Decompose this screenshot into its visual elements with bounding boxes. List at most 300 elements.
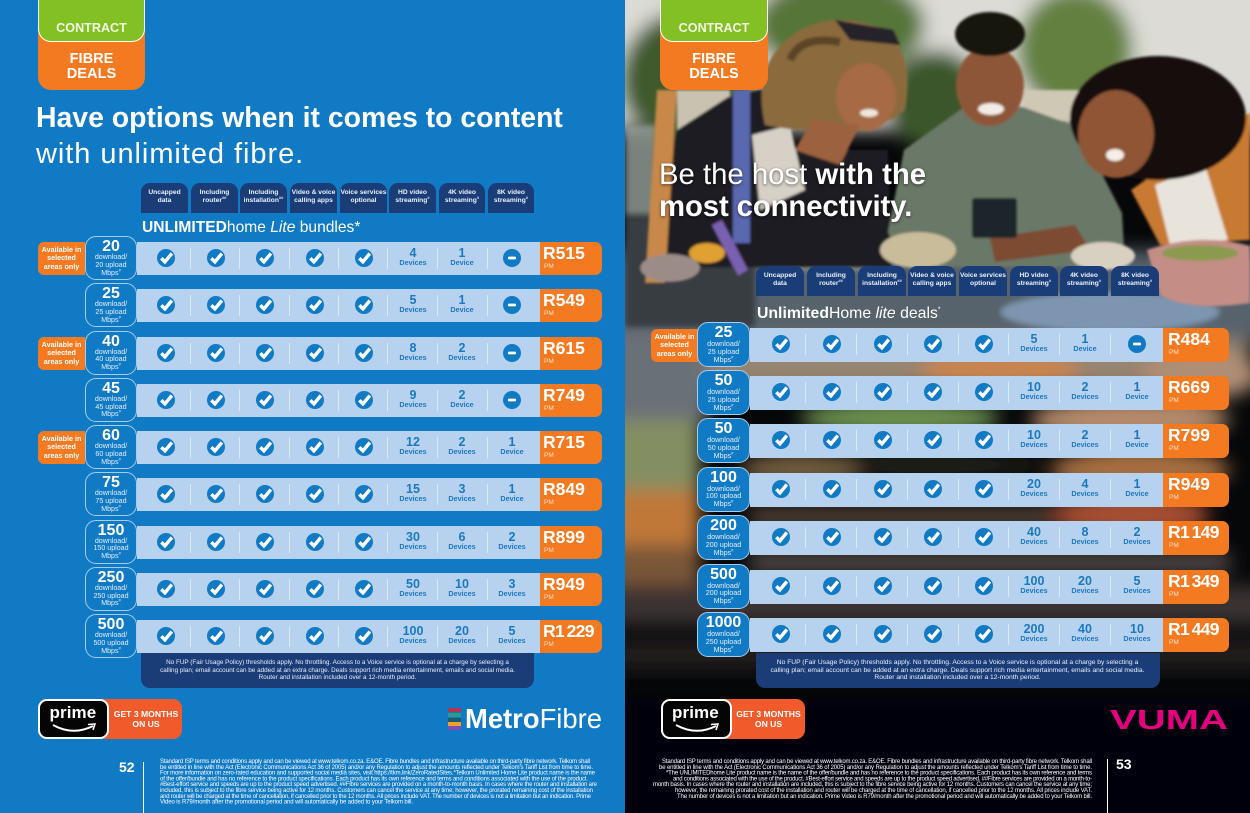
deal row: 100 Mbps R949: 20 [1027,476,1041,490]
table header: left feature tabs: optional [350,197,376,204]
deal row: 50/50 Mbps R799: 1 [1134,428,1140,442]
deal row: 100 Mbps R949: download/ [707,484,740,492]
deal row: 50/50 Mbps R799: Devices [1020,440,1048,449]
deal row: 45 Mbps R749: 45 upload [95,403,127,411]
table header: left feature tabs: streaming# [494,195,528,204]
deal row: 60 Mbps R715: 1 [509,435,515,449]
deal row: 1000 Mbps R1 449: Devices [1071,634,1099,643]
deal row: 100 Mbps R949: Device [1125,488,1149,498]
terms and conditions, left: and router will be charged at the time of cancellation, if cancelled prior to the 12 months. All prices include VAT. The number of devices is not a limitation but an indication. Prime [160,794,592,800]
table header: left feature tabs: router## [203,195,226,204]
deal row: 60 Mbps R715: 12 [406,435,420,449]
deal row: 150 Mbps R899: Mbps# [101,551,121,560]
deal row: 250 Mbps R949: download/ [95,584,127,592]
table header: left feature tabs: Including [200,189,229,196]
deal row: 50/25 Mbps R669: PM [1169,397,1179,404]
badge: contract fibre deals, left: CONTRACT [56,21,127,35]
deal row: 50/25 Mbps R669: 1 [1134,380,1140,394]
deal row: 200 Mbps R1 149: Devices [1123,537,1151,546]
deal row: 250 Mbps R949: 50 [406,577,420,591]
deal row: 75 Mbps R849: Mbps# [101,503,121,513]
deal row: 250 Mbps R949: R949 [543,574,585,594]
table header: right feature tabs: 4K video [1070,272,1098,279]
deal row: 500 Mbps R1 229: Devices [399,636,427,645]
deal row: 150 Mbps R899: 150 [98,522,124,538]
callout: prime video offer, right: prime [672,703,719,722]
table header: left feature tabs: 8K video [497,189,525,196]
deal row: 500 Mbps R1 349: R1 349 [1168,570,1219,590]
deal row: 500 Mbps R1 349: Mbps# [714,596,733,605]
deal row: 150 Mbps R899: download/ [95,536,127,544]
tag: available in selected areas, 25: Available in [655,332,694,340]
terms and conditions, right: month basis. In cases where the router and installation are included, this is subject to the fibre service being active for 12 months. Customers can cancel the service at any time; [653,782,1092,788]
deal row: 25 Mbps R484: Mbps# [714,354,733,364]
deal row: 25 Mbps R549 [85,283,602,327]
deal row: 500 Mbps R1 229: 500 [98,616,124,633]
deal row: 20 Mbps R515: download/ [95,253,127,261]
badge: contract fibre deals, right [660,0,768,90]
deal row: 200 Mbps R1 149: PM [1169,542,1179,549]
deal row: 250 Mbps R949: 10 [455,577,469,591]
deal row: 75 Mbps R849: 75 [102,474,120,491]
logo: MetroFibre: MetroFibre [465,703,602,734]
deal row: 100 Mbps R949 [697,467,1229,512]
deal row: 45 Mbps R749: Mbps# [101,409,121,418]
table header: left feature tabs [141,183,534,213]
deal row: 50/25 Mbps R669: Mbps# [714,402,733,412]
terms and conditions, left: of the offer/bundle and has no reference to the product specifications. Each product has its own reference and terms and conditions associated with the use of the product. [160,776,588,782]
title: right page heading [659,158,926,224]
deal row: 150 Mbps R899: R899 [543,526,585,546]
deal row: 40 Mbps R615 [85,331,602,375]
callout: prime video offer, left: GET 3 MONTHS [114,709,178,719]
deal row: 25 Mbps R484: Device [1073,344,1097,353]
deal row: 500 Mbps R1 349: download/ [707,580,740,590]
table header: right feature tabs: Including [816,272,846,279]
deal row: 200 Mbps R1 149: 2 [1134,525,1140,539]
deal row: 25 Mbps R549: 25 upload [95,308,127,316]
note: right fair usage policy [756,653,1160,688]
deal row: 75 Mbps R849: download/ [95,489,127,497]
deal row: 25 Mbps R549: 5 [410,293,416,307]
deal row: 1000 Mbps R1 449: download/ [707,629,740,638]
deal row: 25 Mbps R549: Devices [399,305,427,314]
deal row: 200 Mbps R1 149: download/ [707,532,740,541]
deal row: 150 Mbps R899: PM [544,546,554,554]
deal row: 1000 Mbps R1 449: Devices [1020,634,1048,643]
table header: left feature tabs: Voice services [340,189,386,196]
deal row: 50/50 Mbps R799: Mbps# [714,450,733,460]
deal row: 200 Mbps R1 149: 200 upload [706,540,741,549]
deal row: 60 Mbps R715: Mbps# [101,456,121,466]
deal row: 100 Mbps R949: 1 [1134,476,1140,490]
callout: prime video offer, left [38,699,182,739]
table header: right feature tabs: Voice services [960,272,1006,279]
tag: available in selected areas, 40: selected [47,348,76,357]
terms and conditions, right [653,758,1108,813]
deal row: 75 Mbps R849: 3 [459,482,465,496]
deal row: 25 Mbps R549: PM [544,310,554,317]
deal row: 500 Mbps R1 349 [697,564,1229,609]
deal row: 40 Mbps R615: R615 [543,338,585,358]
table header: left feature tabs: installation## [244,195,283,204]
table header: right feature tabs: calling apps [913,280,951,287]
deal row: 25 Mbps R484: 25 [715,324,732,341]
deal row: 100 Mbps R949: Mbps# [714,499,733,508]
title: right page heading: Be the host with the [659,158,926,191]
badge: contract fibre deals, right: CONTRACT [679,21,749,35]
deal row: 25 Mbps R484 [697,322,1229,367]
panel: left page background [0,0,625,813]
deal row: 75 Mbps R849: Device [500,494,524,503]
deal row: 500 Mbps R1 229: 500 upload [93,639,129,647]
deal row: 250 Mbps R949: PM [544,594,554,601]
deal row: 250 Mbps R949: Devices [498,589,526,598]
deal row: 1000 Mbps R1 449: PM [1169,639,1179,646]
deal row: 40 Mbps R615: Mbps# [101,362,121,371]
deal row: 25 Mbps R549: download/ [95,300,127,308]
table header: right feature tabs: HD video [1020,272,1048,279]
deal row: 1000 Mbps R1 449: R1 449 [1168,619,1219,639]
deal row: 25 Mbps R484: download/ [707,339,740,348]
deal row: 250 Mbps R949: Devices [399,589,427,598]
table header: right feature tabs: Video & voice [910,272,954,279]
deal row: 1000 Mbps R1 449: 1000 [706,614,741,631]
terms and conditions, left: For more information on zero-rated education and supported social media sites, visit https://tkm.link/ZeroRatedSites.*Telkom Unlimited Home Lite product name is the name [160,771,596,777]
deal row: 20 Mbps R515: Device [450,258,474,267]
title: left page heading: with unlimited fibre. [36,138,304,170]
deal row: 500 Mbps R1 349: 500 [710,566,737,582]
deal row: 50/25 Mbps R669: Devices [1071,392,1099,401]
deal row: 45 Mbps R749 [85,378,602,422]
terms and conditions, right: Standard ISP terms and conditions apply and can be viewed at www.telkom.co.za. E&OE. Fibre bundles and infrastructure available on third-party fibre network. Telkom shall [662,759,1092,765]
deal row: 50/50 Mbps R799: 50 [715,420,732,437]
deal row: 25 Mbps R549: Mbps# [101,314,121,324]
table header: left feature tabs: HD video [398,189,427,196]
badge: contract fibre deals, left [38,0,145,90]
deal row: 1000 Mbps R1 449: Devices [1123,634,1151,643]
note: left fair usage policy: No FUP (Fair Usage Policy) thresholds apply. No throttling. Access to a Voice service is optional at a charge by selecting a [166,659,509,666]
deal row: 500 Mbps R1 349: 200 upload [706,588,741,597]
deal row: 40 Mbps R615: PM [544,358,554,364]
deal row: 50/25 Mbps R669: Devices [1020,392,1048,401]
deal row: 75 Mbps R849: Devices [448,494,476,503]
deal row: 50/25 Mbps R669: download/ [707,387,740,396]
deal row: 250 Mbps R949 [85,567,602,611]
panel: right page photo of three friends at a table [625,0,1250,813]
tag: available in selected areas, 60: Available in [42,434,81,442]
deal row: 25 Mbps R484: R484 [1168,329,1210,349]
deal row: 75 Mbps R849: Devices [399,494,427,503]
deal row: 100 Mbps R949: R949 [1168,474,1210,494]
deal row: 45 Mbps R749: 9 [410,388,416,402]
deal row: 25 Mbps R549: R549 [543,290,585,310]
table header: right feature tabs: Including [867,272,897,279]
deal row: 50/50 Mbps R799: 50 upload [708,443,739,452]
deal row: 500 Mbps R1 229: PM [544,641,554,648]
deal row: 50/25 Mbps R669: R669 [1168,377,1210,397]
deal row: 500 Mbps R1 349: 5 [1134,574,1140,588]
deal row: 500 Mbps R1 229: Devices [498,636,526,645]
title: right page heading: most connectivity. [659,190,912,223]
deal row: 200 Mbps R1 149: 8 [1082,525,1088,539]
deal row: 60 Mbps R715: 60 upload [95,450,127,458]
terms and conditions, right: *The UNLIMITEDhome Lite product name is the name of the offer/bundle and has no reference to the product specifications. Each product has its own reference and terms [666,771,1092,777]
deal row: 50/25 Mbps R669 [697,370,1229,415]
deal row: 150 Mbps R899: Devices [448,542,476,550]
deal row: 40 Mbps R615: download/ [95,348,127,356]
deal row: 50/50 Mbps R799: R799 [1168,425,1210,445]
deal row: 60 Mbps R715: PM [544,452,554,459]
deal row: 45 Mbps R749: PM [544,405,554,412]
tag: available in selected areas, 25: areas only [657,348,692,358]
deal row: 20 Mbps R515 [85,236,602,280]
deal row: 250 Mbps R949: Devices [448,589,476,598]
terms and conditions, right: and conditions associated with the use of the product. #Best-effort service and speeds are up to the product speed advertised. ##Fibre services are provided on a month-to- [673,776,1092,782]
deal row: 60 Mbps R715: Device [500,447,524,456]
deal row: 1000 Mbps R1 449: 40 [1078,622,1092,636]
tag: available in selected areas, 25 [651,329,698,362]
table header: left feature tabs: streaming# [445,195,479,204]
deal row: 60 Mbps R715: Devices [448,447,476,456]
tag: available in selected areas, 20: selected [47,253,76,262]
terms and conditions, left: Standard ISP terms and conditions apply and can be viewed at www.telkom.co.za. E&OE. Fibre bundles and infrastructure available on third-party fibre network. Telkom shall [160,759,590,765]
deal row: 45 Mbps R749: Device [450,400,474,409]
deal row: 150 Mbps R899: 6 [459,530,465,544]
deal row: 200 Mbps R1 149: Mbps# [714,547,733,557]
deal row: 200 Mbps R1 149: Devices [1071,537,1099,546]
deal row: 1000 Mbps R1 449: Mbps# [714,644,733,654]
note: left fair usage policy [141,653,534,688]
title: left page heading [36,102,563,170]
deal row: 25 Mbps R549: Device [450,305,474,314]
tag: available in selected areas, 20 [38,242,85,275]
tag: available in selected areas, 40: Available in [42,340,81,348]
heading: UnlimitedHome lite deals: UnlimitedHome lite deals* [757,305,941,322]
table header: right feature tabs: data [773,280,787,287]
tag: available in selected areas, 60: selected [47,442,76,451]
deal row: 150 Mbps R899: 150 upload [93,544,129,552]
deal row: 20 Mbps R515: 20 [102,238,120,255]
deal row: 1000 Mbps R1 449 [697,612,1229,657]
note: left fair usage policy: Router and installation included over a 12-month period. [259,674,416,681]
deal row: 20 Mbps R515: 20 upload [95,261,127,269]
deal row: 45 Mbps R749: Devices [399,400,427,409]
terms and conditions, right: The number of devices is not a limitation but an indication. Prime Video is R79/month after the promotional period and will automatically be added to your Telkom bill. [677,794,1092,800]
deal row: 25 Mbps R484: 5 [1031,332,1037,346]
note: right fair usage policy: Router and installation included over a 12-month period. [874,674,1041,681]
deal row: 50/50 Mbps R799: PM [1169,445,1179,452]
deal row: 60 Mbps R715 [85,425,602,469]
table header: right feature tabs: streaming# [1118,278,1152,287]
terms and conditions, left [143,758,598,813]
deal row: 20 Mbps R515: PM [544,263,554,270]
note: left fair usage policy: calling plan; email account can be added at an extra charge. Deals support rich media entertainment, emails and social media. [160,667,515,674]
deal row: 150 Mbps R899: Devices [399,542,427,550]
tag: available in selected areas, 60: areas only [44,450,79,460]
deal row: 60 Mbps R715: 60 [102,427,120,444]
terms and conditions, left: included, this is subject to the fibre service being active for 12 months. Customers can cancel the service at any time; however, the prorated remaining cost of the installation [160,788,593,794]
deal row: 40 Mbps R615: Devices [448,352,476,362]
deal row: 60 Mbps R715: R715 [543,432,585,452]
table header: left feature tabs: Video & voice [292,189,335,196]
note: right fair usage policy: calling plan; email account can be added at an extra charge. Deals support rich media entertainment, emails and social media. [771,667,1144,674]
callout: prime video offer, right: ON US [755,719,782,729]
deal row: 500 Mbps R1 349: PM [1169,590,1179,598]
tag: available in selected areas, 40 [38,337,85,370]
deal row: 150 Mbps R899: Devices [498,542,526,550]
deal row: 100 Mbps R949: 4 [1082,476,1088,490]
deal row: 75 Mbps R849: PM [544,499,554,506]
tag: available in selected areas, 25: selected [660,340,689,349]
terms and conditions, left: be entitled in line with the Act (Electronic Communications Act 36 of 2005) and/or any Regulation to adjust the amounts reflected under Telkom's Tariff List from time to time. [160,765,593,771]
badge: contract fibre deals, right: DEALS [689,66,739,82]
deal row: 100 Mbps R949: Devices [1020,488,1048,498]
badge: contract fibre deals, left: FIBRE [70,51,113,67]
callout: prime video offer, left: ON US [132,719,160,729]
deal row: 500 Mbps R1 349: Devices [1020,586,1048,594]
table header: right feature tabs [756,266,1159,296]
deal row: 250 Mbps R949: 3 [509,577,515,591]
callout: prime video offer, right: GET 3 MONTHS [736,709,801,719]
deal row: 200 Mbps R1 149: 40 [1027,525,1041,539]
tag: available in selected areas, 40: areas only [44,356,79,366]
tag: available in selected areas, 20: Available in [42,244,81,254]
deal row: 1000 Mbps R1 449: 250 upload [706,637,741,646]
deal row: 20 Mbps R515: R515 [543,243,585,263]
deal row: 500 Mbps R1 349: 100 [1024,574,1044,588]
deal row: 20 Mbps R515: 4 [410,246,416,260]
deal row: 500 Mbps R1 229: 20 [455,624,469,638]
deal row: 100 Mbps R949: Devices [1071,488,1099,498]
terms and conditions, left: #Best-effort service and speeds are up to the product speed advertised. ##Fibre services are provided on a month-to-month basis. In cases where the router and installation are [160,782,598,788]
deal row: 40 Mbps R615: Devices [399,352,427,362]
table header: left feature tabs: Including [249,189,278,196]
deal row: 50/25 Mbps R669: Device [1125,392,1149,401]
deal row: 60 Mbps R715: 2 [459,435,465,449]
deal row: 60 Mbps R715: Devices [399,447,427,456]
terms and conditions, right: be entitled in line with the Act (Electronic Communications Act 36 of 2005) and/or any Regulation to adjust the amounts reflected under Telkom's Tariff List from time to time. [659,765,1092,771]
deal row: 20 Mbps R515: Mbps# [101,267,121,277]
deal row: 1000 Mbps R1 449: 10 [1130,622,1144,636]
deal row: 150 Mbps R899: 30 [406,530,420,544]
table header: right feature tabs: installation## [862,278,902,287]
deal row: 40 Mbps R615: 8 [410,340,416,354]
deal row: 500 Mbps R1 229: Mbps# [101,645,121,655]
deal row: 50/50 Mbps R799: 10 [1027,428,1041,442]
deal row: 500 Mbps R1 229: R1 229 [543,621,594,641]
page number 52: 52 [119,759,135,775]
table header: left feature tabs: Uncapped [148,189,181,196]
deal row: 25 Mbps R549: 1 [459,293,465,307]
deal row: 150 Mbps R899 [85,520,602,564]
deal row: 500 Mbps R1 229 [85,614,602,658]
deal row: 100 Mbps R949: 100 [710,468,737,486]
badge: contract fibre deals, right: FIBRE [692,51,736,67]
deal row: 50/50 Mbps R799: Device [1125,440,1149,449]
tag: available in selected areas, 60 [38,431,85,464]
deal row: 50/50 Mbps R799 [697,418,1229,463]
deal row: 500 Mbps R1 349: Devices [1071,586,1099,594]
deal row: 75 Mbps R849 [85,472,602,516]
deal row: 250 Mbps R949: Mbps# [101,598,121,607]
deal row: 250 Mbps R949: 250 upload [93,592,129,600]
deal row: 40 Mbps R615: 40 [102,332,120,350]
callout: prime video offer, left: prime [50,703,96,722]
deal row: 25 Mbps R484: Devices [1020,344,1048,353]
deal row: 40 Mbps R615: 2 [459,340,465,354]
deal row: 25 Mbps R484: 1 [1082,332,1088,346]
deal row: 500 Mbps R1 229: 5 [509,624,515,638]
deal row: 50/25 Mbps R669: 2 [1082,380,1088,394]
deal row: 50/25 Mbps R669: 50 [715,372,732,389]
table header: right feature tabs: Uncapped [764,272,796,279]
table header: left feature tabs: calling apps [294,197,333,204]
deal row: 75 Mbps R849: 1 [509,482,515,496]
deal row: 50/25 Mbps R669: 10 [1027,380,1041,394]
callout: prime video offer, right [660,699,804,739]
deal row: 100 Mbps R949: 100 upload [706,491,741,500]
deal row: 45 Mbps R749: R749 [543,385,585,405]
terms and conditions, left: Video is R79/month after the promotional period and will automatically be added to your Telkom bill. [160,800,413,806]
deal row: 45 Mbps R749: 45 [102,380,120,397]
tag: available in selected areas, 20: areas only [44,262,79,270]
deal row: 25 Mbps R484: PM [1169,349,1179,356]
table header: left feature tabs: 4K video [448,189,476,196]
deal row: 20 Mbps R515: Devices [399,258,427,267]
deal row: 200 Mbps R1 149: Devices [1020,537,1048,546]
deal row: 150 Mbps R899: 2 [509,530,515,544]
terms and conditions, right: however, the remaining prorated cost of the installation and router will be charged at the time of cancellation, if cancelled prior to the 12 months. All prices include VAT. [675,788,1092,794]
table header: right feature tabs: optional [970,280,996,287]
badge: contract fibre deals, left: DEALS [67,66,116,82]
deal row: 500 Mbps R1 229: download/ [95,631,127,639]
table header: right feature tabs: router## [819,278,843,287]
deal row: 20 Mbps R515: 1 [459,246,465,260]
table header: right feature tabs: streaming# [1017,278,1051,287]
deal row: 45 Mbps R749: 2 [459,388,465,402]
deal row: 200 Mbps R1 149 [697,515,1229,560]
note: right fair usage policy: No FUP (Fair Usage Policy) thresholds apply. No throttling. Access to a Voice service is optional at a charge by selecting a [777,659,1138,666]
deal row: 50/50 Mbps R799: Devices [1071,440,1099,449]
page number 53: 53 [1116,756,1132,772]
table header: left feature tabs: data [158,197,171,204]
deal row: 200 Mbps R1 149: R1 149 [1168,522,1219,542]
deal row: 75 Mbps R849: R849 [543,479,585,499]
deal row: 500 Mbps R1 229: Devices [448,636,476,645]
title: left page heading: Have options when it comes to content [36,102,563,134]
deal row: 25 Mbps R484: 25 upload [708,347,739,356]
deal row: 500 Mbps R1 229: 100 [403,624,423,638]
deal row: 50/25 Mbps R669: 25 upload [708,395,739,404]
deal row: 1000 Mbps R1 449: 200 [1024,622,1044,636]
deal row: 40 Mbps R615: 40 upload [95,355,127,363]
table header: left feature tabs: streaming# [395,195,430,204]
deal row: 250 Mbps R949: 250 [98,569,124,586]
table header: right feature tabs: 8K video [1121,272,1149,279]
deal row: 75 Mbps R849: 75 upload [95,497,127,505]
deal row: 60 Mbps R715: download/ [95,442,127,450]
heading: UNLIMITEDhome Lite bundles: UNLIMITEDhome Lite bundles* [142,219,360,236]
deal row: 45 Mbps R749: download/ [95,395,127,403]
deal row: 50/50 Mbps R799: download/ [707,435,740,444]
deal row: 100 Mbps R949: PM [1169,494,1179,500]
deal row: 500 Mbps R1 349: 20 [1078,574,1092,588]
deal row: 75 Mbps R849: 15 [406,482,420,496]
deal row: 500 Mbps R1 349: Devices [1123,586,1151,594]
deal row: 200 Mbps R1 149: 200 [710,517,737,534]
deal row: 50/50 Mbps R799: 2 [1082,428,1088,442]
